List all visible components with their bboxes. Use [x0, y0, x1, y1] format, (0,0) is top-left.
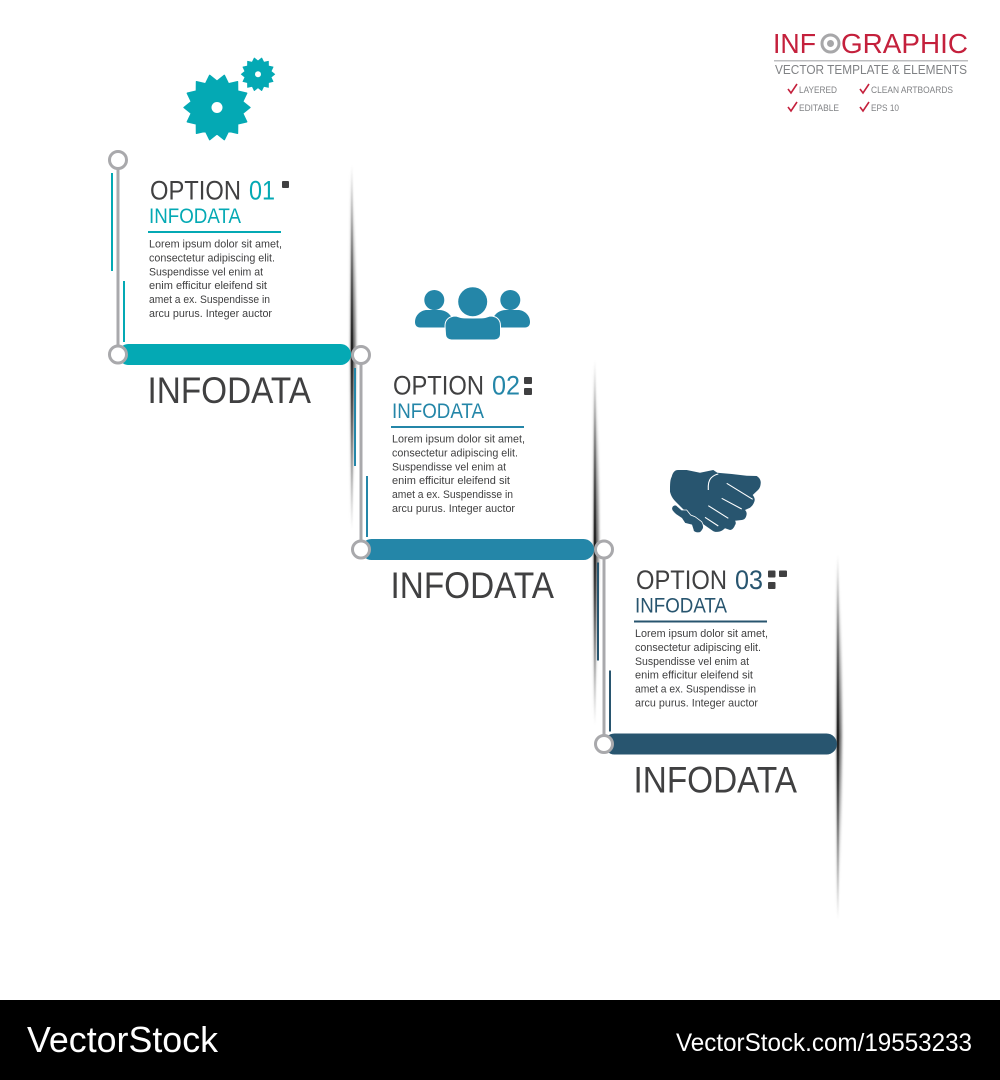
- body text: Suspendisse vel enim at: [392, 461, 506, 473]
- logo title: [773, 28, 968, 59]
- body text: arcu purus. Integer auctor: [635, 698, 758, 710]
- body text: consectetur adipiscing elit.: [392, 448, 518, 460]
- number: 03: [735, 565, 763, 595]
- bottom ring: [110, 346, 126, 363]
- icon: handshake: [670, 470, 761, 533]
- body text: amet a ex. Suspendisse in: [392, 489, 513, 501]
- body text: Lorem ipsum dolor sit amet,: [635, 628, 768, 640]
- body text: Lorem ipsum dolor sit amet,: [149, 238, 282, 250]
- panel edge shadow: [594, 360, 599, 725]
- body text: [635, 628, 768, 710]
- panel: option 03: [596, 541, 842, 920]
- body text: consectetur adipiscing elit.: [149, 252, 275, 264]
- heading: OPTION: [636, 565, 727, 595]
- logo checklist: [788, 84, 953, 114]
- heading: OPTION: [150, 176, 241, 206]
- bar: [604, 734, 837, 754]
- logo subtitle: VECTOR TEMPLATE & ELEMENTS: [775, 63, 967, 77]
- logo title: GRAPHIC: [841, 28, 968, 59]
- subheading: INFODATA: [149, 205, 241, 228]
- subheading: INFODATA: [635, 594, 727, 618]
- body text: Suspendisse vel enim at: [635, 656, 749, 668]
- big label: INFODATA: [148, 370, 311, 411]
- footer url: VectorStock.com/19553233: [676, 1029, 972, 1057]
- logo checklist: EDITABLE: [799, 103, 839, 114]
- big label: INFODATA: [634, 760, 797, 800]
- body text: amet a ex. Suspendisse in: [149, 294, 270, 306]
- body text: consectetur adipiscing elit.: [635, 642, 761, 654]
- number: 01: [249, 176, 275, 206]
- timeline rail: [360, 361, 362, 543]
- body text: enim efficitur eleifend sit: [149, 280, 267, 292]
- top ring: [110, 152, 126, 168]
- top ring: [596, 541, 612, 558]
- body text: enim efficitur eleifend sit: [635, 670, 753, 682]
- accent lines: [111, 173, 125, 342]
- icon: people: [415, 287, 530, 340]
- body text: Suspendisse vel enim at: [149, 266, 263, 278]
- body text: enim efficitur eleifend sit: [392, 475, 510, 487]
- panel edge shadow: [836, 554, 842, 920]
- body text: amet a ex. Suspendisse in: [635, 684, 756, 696]
- bar: [361, 539, 594, 560]
- body text: [149, 238, 282, 320]
- marker: [282, 181, 289, 188]
- accent lines: [354, 368, 368, 537]
- icon: gears: [184, 58, 275, 140]
- logo checklist: CLEAN ARTBOARDS: [871, 85, 953, 96]
- panel: option 02: [352, 346, 599, 725]
- body text: Lorem ipsum dolor sit amet,: [392, 434, 525, 446]
- body text: arcu purus. Integer auctor: [392, 503, 515, 515]
- markers: [768, 570, 787, 589]
- heading: OPTION: [393, 370, 484, 400]
- panel edge shadow: [350, 165, 356, 530]
- footer band: [0, 1000, 1000, 1080]
- logo ring: [822, 35, 839, 52]
- big label: INFODATA: [390, 565, 554, 606]
- logo checklist: EPS 10: [871, 103, 899, 114]
- panel: option 01: [110, 152, 356, 530]
- bottom ring: [596, 736, 612, 752]
- accent lines: [597, 562, 611, 732]
- timeline rail: [602, 556, 606, 738]
- body text: arcu purus. Integer auctor: [149, 308, 272, 320]
- subheading: INFODATA: [392, 400, 484, 423]
- bar: [118, 344, 351, 365]
- timeline rail: [116, 166, 120, 348]
- footer brand: VectorStock: [27, 1019, 219, 1060]
- markers: [524, 377, 532, 395]
- logo title: INF: [773, 28, 816, 59]
- bottom ring: [352, 541, 370, 558]
- logo: infographic template: [773, 28, 968, 114]
- logo checklist: LAYERED: [799, 85, 837, 96]
- top ring: [352, 346, 370, 364]
- number: 02: [492, 370, 520, 400]
- body text: [392, 434, 525, 515]
